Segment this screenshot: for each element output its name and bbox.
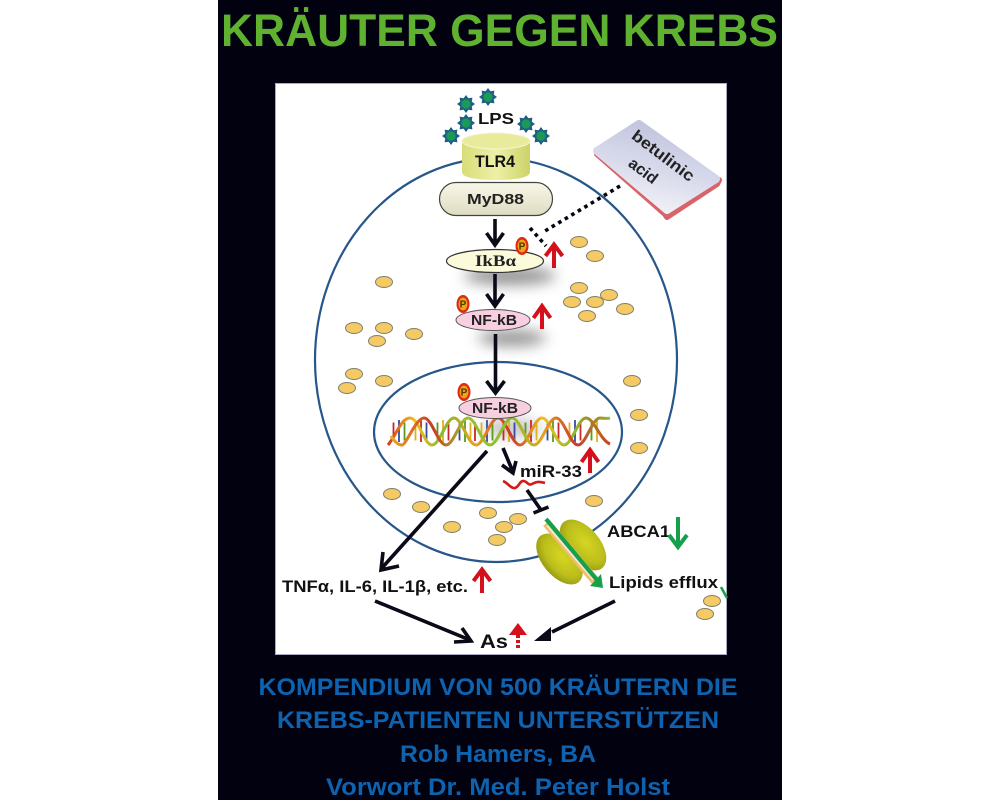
TLR4 receptor: TLR4 (475, 152, 516, 171)
arrow: DNA to miR-33 (502, 448, 516, 473)
NF-kB cytoplasm: NF-kB (471, 313, 517, 329)
arrow: red up miR-33 (582, 450, 598, 473)
arrow: lipids efflux to As (552, 601, 615, 632)
label: ABCA1: ABCA1 (607, 522, 670, 541)
subtitle: KREBS-PATIENTEN UNTERSTÜTZEN (277, 707, 719, 734)
icon: LPS molecules (442, 88, 550, 145)
label: As: As (480, 632, 508, 653)
label: cytokines: TNFα, IL-6, IL-1β, etc. (282, 577, 468, 596)
subtitle: KOMPENDIUM VON 500 KRÄUTERN DIE (258, 674, 738, 701)
cell membrane (315, 158, 677, 562)
panel: pathway diagram (276, 84, 727, 654)
subtitle: Rob Hamers, BA (400, 741, 596, 768)
lipid droplets (338, 236, 720, 620)
arrow: DNA to cytokines (381, 451, 487, 570)
soft shadows under proteins (464, 267, 556, 436)
arrowhead: fragmented at As (534, 627, 551, 641)
arrow: red up cytokines (474, 570, 490, 593)
label: LPS: LPS (478, 111, 514, 128)
arrow: IkBa to NF-kB (486, 274, 504, 306)
NF-kB cytoplasm (456, 310, 530, 330)
dark cover background (218, 0, 782, 800)
betulinic acid box (597, 124, 719, 217)
IkBa protein (446, 250, 544, 272)
NF-kB nucleus: NF-kB (472, 401, 518, 417)
inhibition: dotted line from betulinic acid (530, 186, 620, 246)
ABCA1 transporter (527, 511, 615, 593)
cropped green arrow fragment (721, 587, 727, 598)
arrow: red dashed up As (509, 623, 527, 648)
MyD88 adaptor: MyD88 (467, 191, 524, 208)
betulinic acid box: acid (625, 155, 661, 188)
MyD88 adaptor (440, 182, 552, 216)
arrow: green lipid efflux (546, 519, 603, 588)
title: KRÄUTER GEGEN KREBS (221, 5, 778, 56)
icon: phosphate on nuclear NF-kB (458, 383, 470, 401)
arrow: NF-kB into nucleus (486, 334, 504, 393)
inhibition: miR-33 to ABCA1 (527, 490, 548, 513)
arrow: MyD88 to IkBa (486, 219, 504, 245)
arrow: red up NF-kB (534, 306, 550, 329)
nucleus membrane (374, 362, 622, 502)
icon: phosphate on IkBa (516, 237, 528, 255)
arrow: cytokines to As (375, 601, 471, 642)
arrow: green down ABCA1 (669, 517, 687, 547)
miR-33 squiggle (503, 481, 545, 488)
DNA helix (388, 418, 610, 445)
label: Lipids efflux: Lipids efflux (609, 574, 719, 592)
label: miR-33: miR-33 (520, 463, 582, 481)
NF-kB nucleus (459, 398, 531, 418)
subtitle (258, 674, 738, 800)
arrow: red up IkBa (546, 244, 562, 268)
icon: phosphate on NF-kB (456, 295, 470, 313)
TLR4 receptor (462, 133, 530, 180)
betulinic acid box: betulinic (628, 127, 697, 186)
IkBa protein: IkBα (475, 253, 516, 270)
